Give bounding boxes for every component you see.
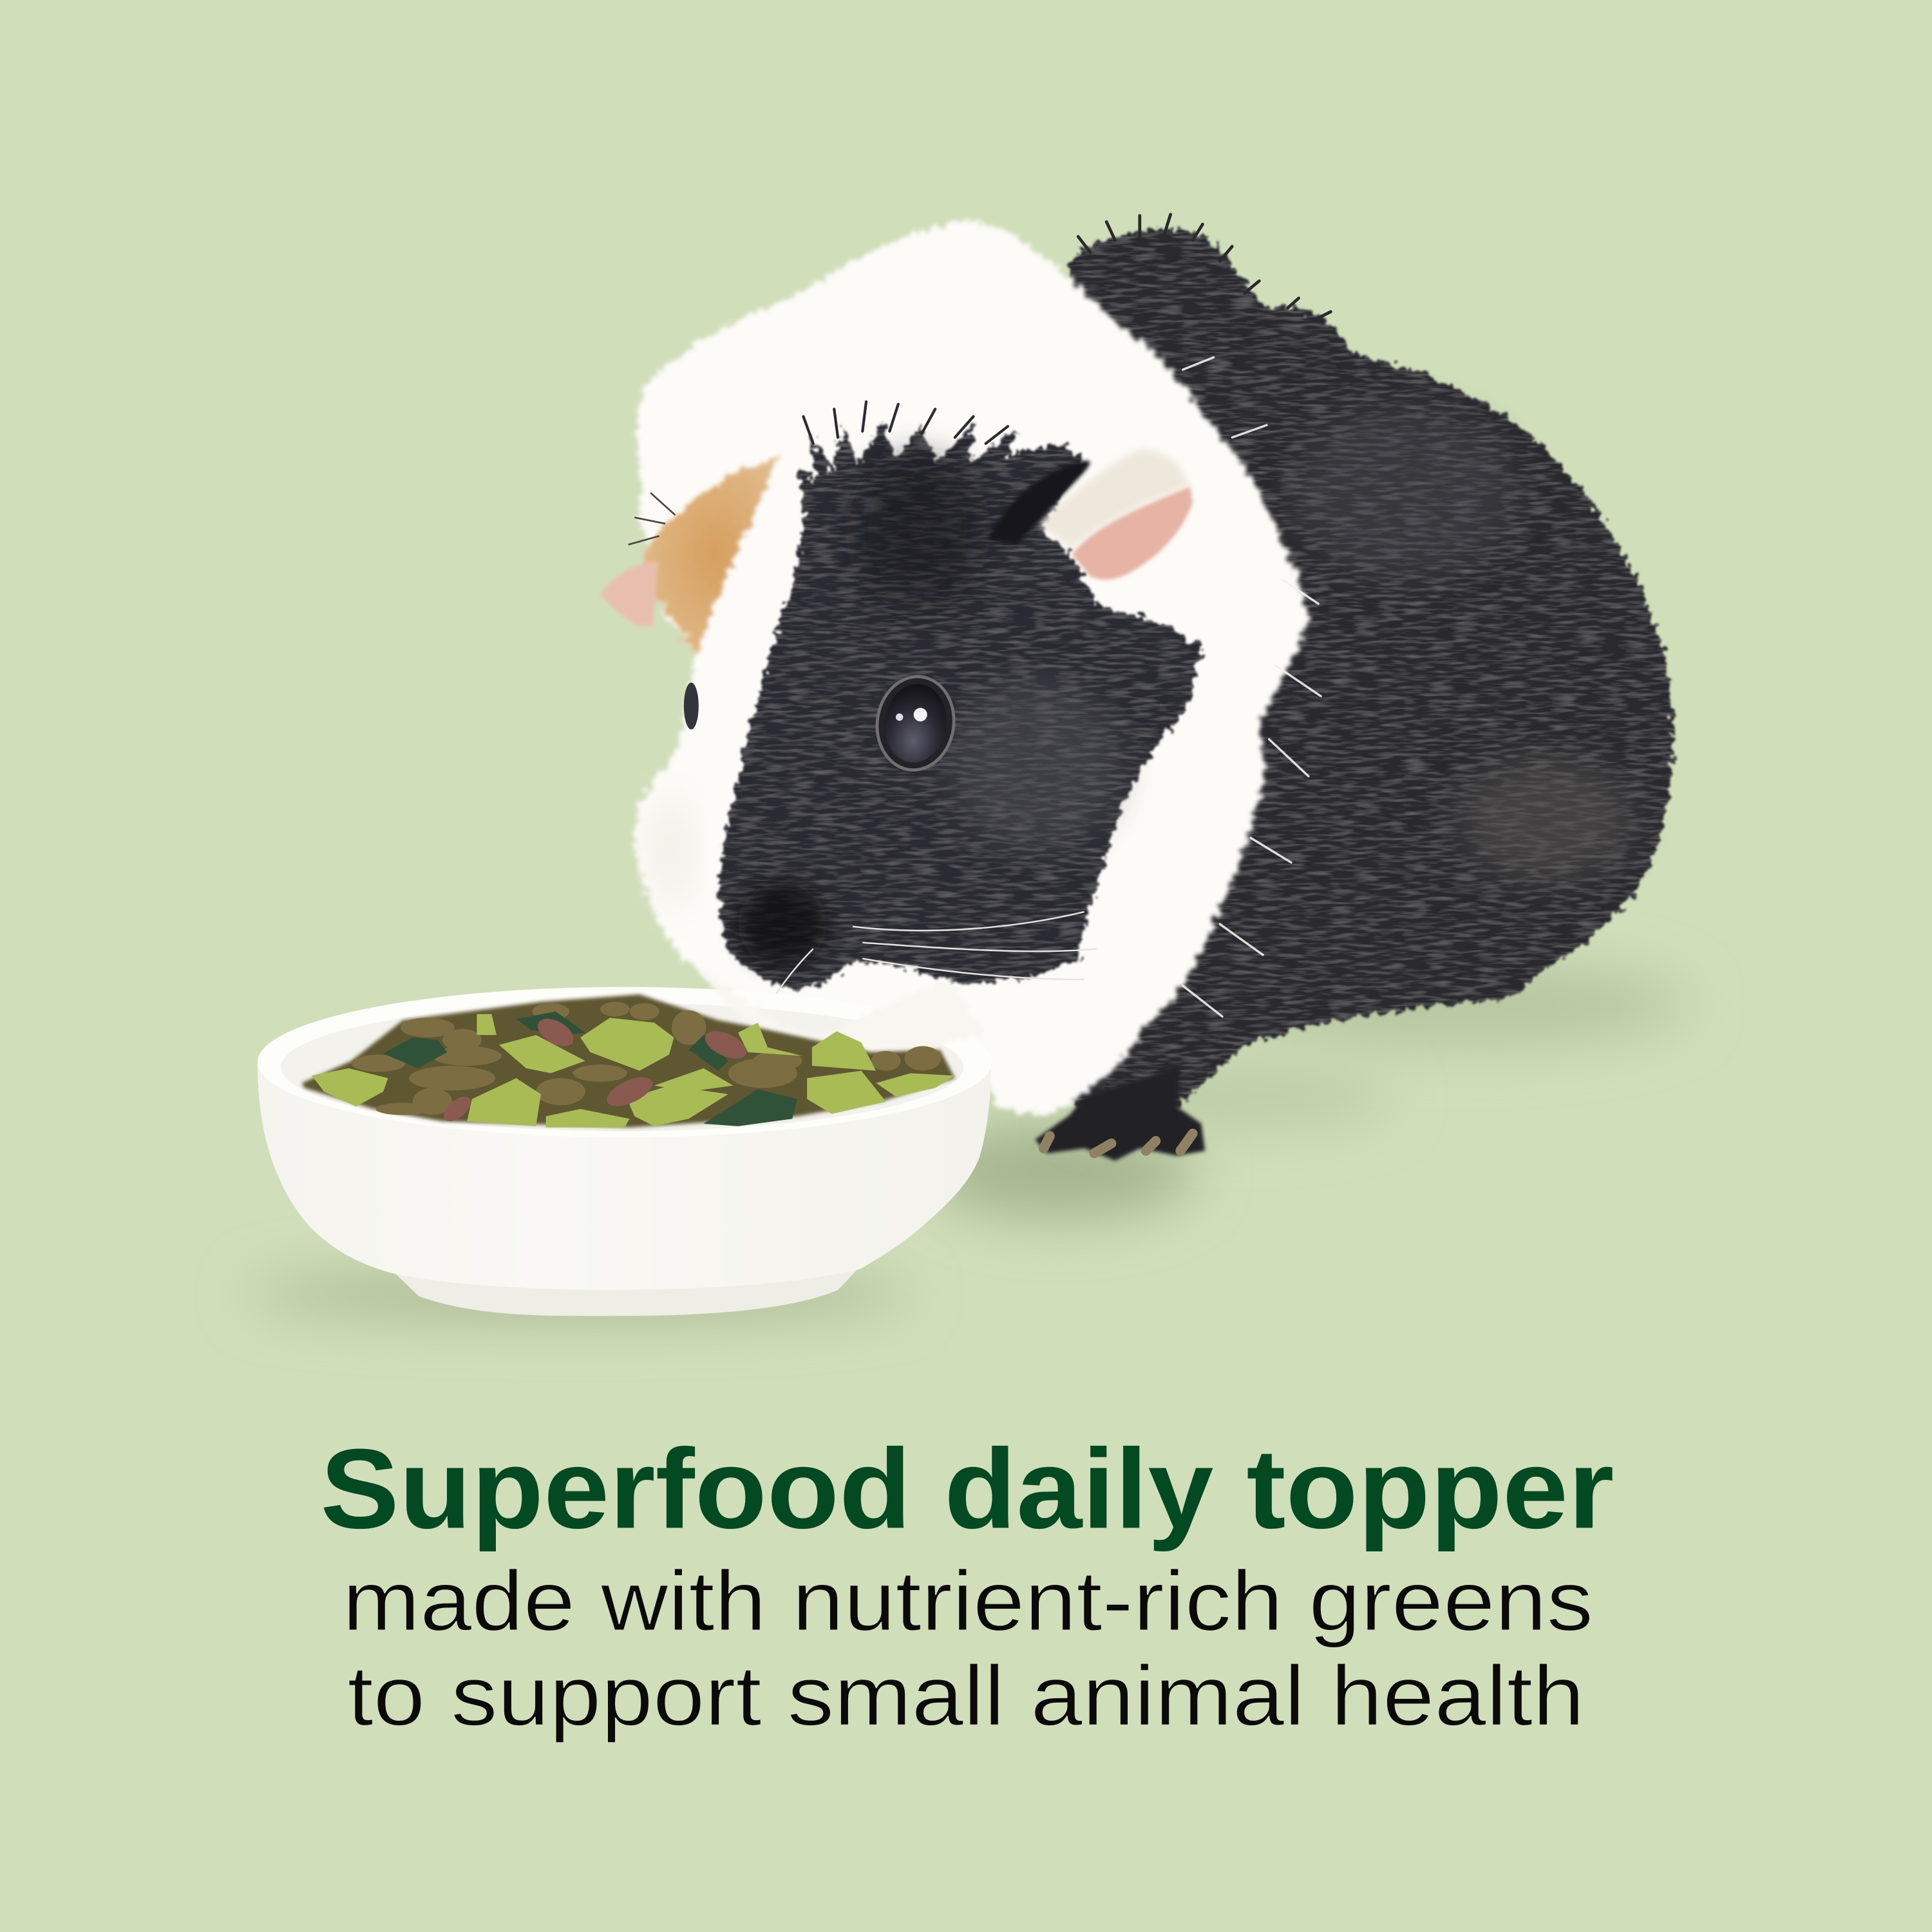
floor shadows — [247, 961, 1688, 1318]
dark greens — [383, 1012, 797, 1126]
body: shoulder sheen — [1294, 406, 1515, 579]
white mane and collar — [636, 222, 1309, 1115]
green flakes — [312, 1014, 955, 1128]
right ear — [988, 450, 1193, 580]
red seeds — [439, 1013, 750, 1126]
food base — [302, 994, 955, 1128]
pellets — [351, 1001, 942, 1115]
far eye — [684, 683, 699, 730]
heading: Superfood daily topper — [320, 1426, 1614, 1552]
bowl rim — [258, 987, 992, 1137]
left ear — [600, 562, 658, 626]
bowl outer body — [258, 1062, 991, 1290]
mane shading — [652, 795, 691, 905]
forehead shadow — [857, 456, 980, 604]
mane fuzz strokes — [1183, 357, 1321, 1016]
food — [302, 994, 955, 1128]
ginger patch dark hairs — [629, 493, 675, 545]
ginger cheek patch — [638, 456, 779, 656]
front paw — [1035, 1066, 1205, 1160]
forehead hairs — [803, 402, 1008, 444]
whiskers — [754, 912, 1097, 1029]
back fur tufts — [1078, 214, 1331, 318]
subheading line 1: made with nutrient-rich greens — [343, 1553, 1593, 1648]
body: dark fur — [1023, 229, 1672, 1115]
food bowl — [258, 987, 992, 1316]
cheek sheen — [949, 677, 1121, 850]
eye — [871, 672, 960, 775]
subheading line 2: to support small animal health — [348, 1648, 1584, 1743]
muzzle — [699, 966, 986, 1054]
muzzle shadow — [738, 882, 827, 966]
bowl foot — [391, 1267, 860, 1316]
body: haunch sheen — [1460, 758, 1633, 881]
guinea pig — [600, 214, 1672, 1160]
bowl inner — [281, 1003, 963, 1131]
black face — [717, 421, 1201, 989]
